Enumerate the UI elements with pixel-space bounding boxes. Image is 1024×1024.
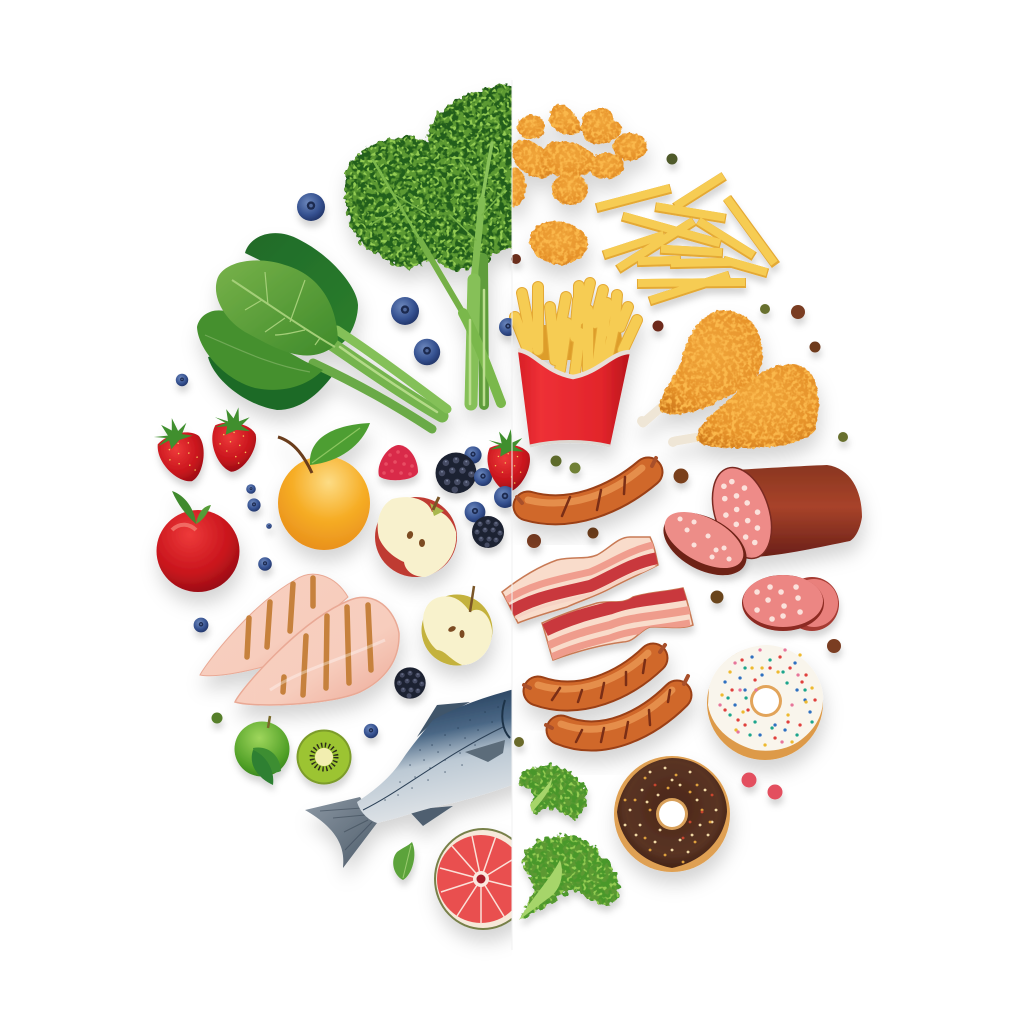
- fries: [515, 283, 637, 373]
- spinach left leaf: [197, 310, 323, 390]
- kale leaf right: [428, 85, 520, 269]
- sausage top: [517, 458, 656, 516]
- sausage middle: [524, 645, 665, 702]
- lateral line: [363, 727, 503, 810]
- spinach: [197, 233, 447, 429]
- panel: processed half: [483, 104, 862, 920]
- fries filler: [525, 325, 625, 360]
- blackberries: [394, 453, 504, 699]
- drumstick upper: [643, 404, 665, 423]
- kale stems: [370, 143, 505, 405]
- small green dot: [212, 712, 222, 724]
- apple leaves: [172, 491, 196, 524]
- crispy nuggets: [500, 104, 647, 265]
- nugget: [517, 115, 545, 139]
- apple half: [375, 497, 457, 577]
- illustration: food circle split into healthy and processed halves: [152, 80, 870, 950]
- kale: [343, 85, 520, 405]
- blueberry on divider: [494, 318, 517, 508]
- grilled chicken breasts: [200, 574, 399, 705]
- green apple: [234, 716, 290, 785]
- sausage lower: [546, 676, 688, 742]
- fries in red box: [515, 283, 637, 446]
- lower fin: [408, 806, 453, 826]
- small apple half: [422, 586, 492, 666]
- spinach stems: [313, 330, 447, 429]
- white iced donut: [707, 645, 823, 760]
- grapefruit half: [434, 828, 532, 930]
- fried drumsticks: [637, 310, 819, 448]
- bacon upper: [502, 537, 658, 624]
- cut face: [702, 460, 782, 566]
- center divider: [512, 80, 513, 950]
- pink candies: [742, 772, 782, 800]
- small leaf: [393, 842, 414, 880]
- golden apple: [278, 423, 370, 550]
- chicken breast front: [235, 597, 399, 705]
- sprinkles: [720, 650, 815, 745]
- salami slice: [653, 500, 757, 588]
- chocolate donut: [614, 756, 730, 872]
- bacon lower: [542, 588, 693, 660]
- kiwi: [296, 730, 352, 784]
- strawberries: [150, 404, 261, 487]
- front slice: [742, 575, 824, 631]
- salami log: [702, 460, 862, 566]
- tail fin: [305, 797, 377, 868]
- back slice: [785, 577, 839, 631]
- fish body: [357, 685, 530, 823]
- broccoli upper: [520, 765, 587, 818]
- spinach main leaf: [216, 260, 338, 355]
- raspberry: [378, 445, 418, 480]
- dorsal fin: [417, 702, 470, 737]
- loose fries: [601, 178, 773, 300]
- salmon fish: [305, 685, 530, 868]
- pectoral fin: [465, 740, 505, 762]
- spinach back leaf: [245, 233, 358, 345]
- broccoli lower: [519, 835, 619, 920]
- red box: [518, 351, 630, 446]
- gill: [502, 700, 510, 738]
- red apple: [156, 491, 240, 592]
- blueberries near divider: [474, 468, 492, 486]
- kale leaf left: [343, 136, 471, 272]
- panel: healthy half: [150, 85, 532, 930]
- peppercorns: [511, 154, 848, 747]
- speckles: [385, 707, 498, 800]
- drumstick lower: [675, 437, 699, 441]
- chicken breast back: [200, 574, 348, 676]
- spinach bottom leaf: [208, 345, 333, 410]
- strawberry on divider: [483, 427, 533, 494]
- blueberries: [176, 193, 485, 738]
- apple leaf: [310, 423, 370, 465]
- sprinkles: [625, 768, 716, 862]
- small salami slices: [742, 575, 839, 631]
- apple leaves: [253, 747, 281, 773]
